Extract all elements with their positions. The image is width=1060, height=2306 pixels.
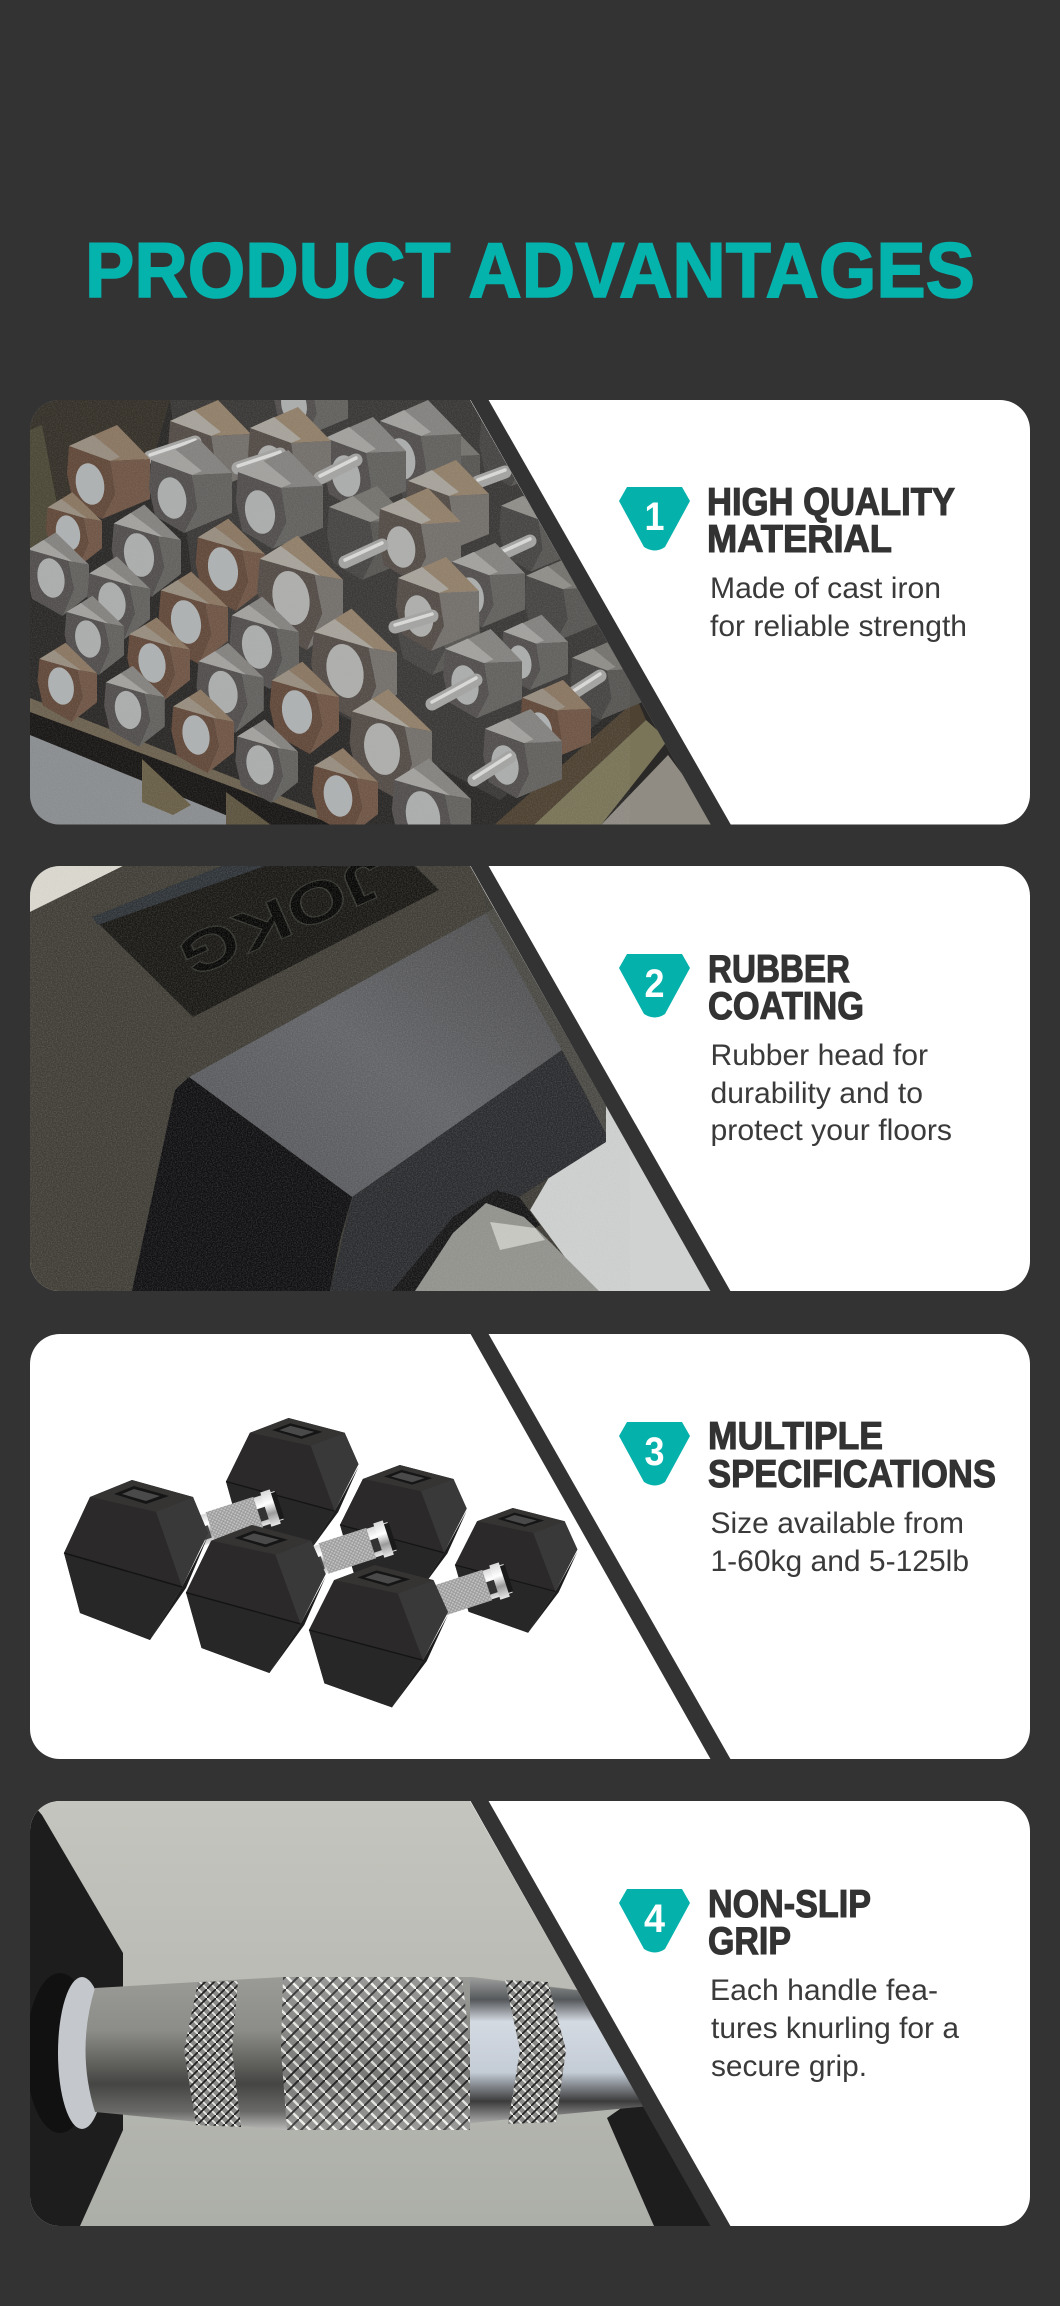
description: for reliable strength [710,610,967,643]
description [710,1039,952,1147]
description [710,1974,959,2083]
floor and pallet [30,698,720,825]
description: Rubber head for [710,1039,928,1072]
heading [708,1415,996,1496]
textured upper facet [189,913,562,1197]
description: Each handle fea- [710,1974,938,2007]
heading [707,481,955,561]
heading [708,948,864,1028]
heading: MULTIPLE [708,1415,883,1458]
description: 1-60kg and 5-125lb [710,1545,969,1578]
collar [30,1973,98,2133]
title: PRODUCT ADVANTAGES [85,226,975,314]
shadowed lower facet [132,1077,352,1291]
description [710,1507,969,1578]
photo: knurled handle close-up [26,1801,730,2226]
chrome handle and collar [392,1190,599,1291]
heading: NON-SLIP [708,1883,871,1926]
panel: rubber coating [30,843,1030,1292]
description [710,572,967,643]
description: protect your floors [710,1114,952,1147]
white card [30,866,1030,1291]
description: Made of cast iron [710,572,941,605]
white wall [530,1090,711,1291]
heading: MATERIAL [707,518,892,561]
embossed logo: JOKG [169,843,396,990]
recessed logo plate [92,866,439,1017]
icon: number badge 2 [619,954,690,1018]
description: Size available from [710,1507,964,1540]
panel: high quality material [30,400,1030,824]
icon: number badge 3: 3 [644,1430,664,1474]
icon: number badge 4 [619,1889,690,1952]
heading [708,1883,871,1963]
description: tures knurling for a [711,2012,959,2045]
icon: number badge 3 [619,1422,690,1486]
frame around logo plate [30,866,486,1291]
white card [30,1801,1030,2226]
photo: three pairs of hex dumbbells [64,1418,577,1707]
icon: number badge 2: 2 [644,962,664,1006]
white card [30,1334,1030,1759]
heading: RUBBER [708,948,850,991]
diagonal divider band [470,1333,731,1760]
diagonal divider band [470,1800,731,2227]
heading: COATING [708,985,864,1028]
diagonal divider band [470,865,731,1292]
diagonal divider band [470,399,731,825]
rubber grain texture [30,866,630,1291]
right knurling [505,1980,566,2124]
panel: non-slip grip [26,1800,1030,2227]
dumbbell heads and handles [30,400,641,824]
icon: number badge 1: 1 [644,495,664,539]
heading: HIGH QUALITY [707,481,955,524]
left knurling [184,1981,241,2127]
icon: number badge 4: 4 [644,1897,666,1941]
heading: GRIP [708,1920,791,1963]
photo: stacked cast iron dumbbells [30,400,711,824]
heading: SPECIFICATIONS [708,1453,996,1496]
centre knurling [281,1977,470,2130]
handle bar [86,1977,660,2130]
description: durability and to [710,1077,923,1110]
photo: rubber dumbbell head close-up [30,843,730,1291]
lower right facet [330,1050,606,1291]
right rubber head [607,2106,710,2226]
panel: multiple specifications [30,1333,1030,1760]
photo grain [30,400,630,825]
icon: number badge 1 [619,487,690,550]
white card [30,400,1030,824]
description: secure grip. [711,2050,867,2083]
left rubber head [30,1801,123,2226]
